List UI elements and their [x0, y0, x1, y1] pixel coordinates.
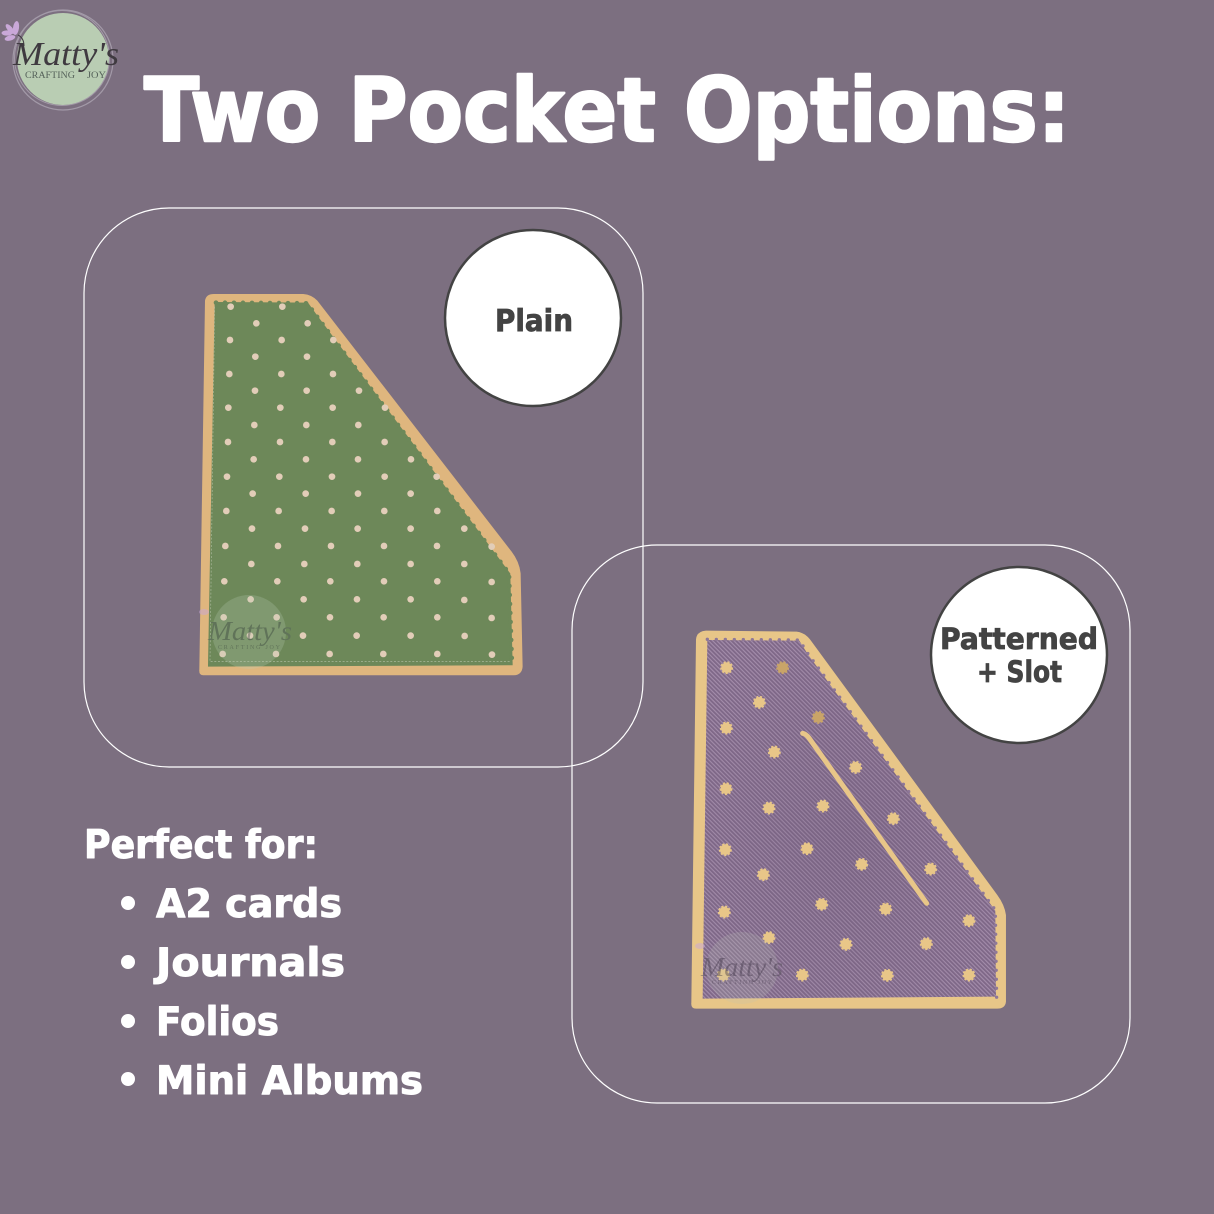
watermark logo: Matty's [700, 952, 783, 982]
text block: perfect for list [84, 823, 423, 1104]
logo: Matty's Crafting Joy: Matty's [12, 36, 119, 73]
list heading: Perfect for: [84, 823, 318, 868]
list item: Mini Albums: Mini Albums [156, 1059, 423, 1104]
slot [803, 733, 927, 903]
title: Two Pocket Options: [144, 59, 1070, 162]
badge: Patterned + Slot: Patterned [940, 622, 1098, 656]
watermark logo [199, 595, 292, 669]
watermark logo: CRAFTING JOY [218, 645, 281, 651]
badge: Plain: Plain [495, 304, 573, 339]
watermark logo: CRAFTING JOY [712, 980, 773, 986]
badge: Patterned + Slot: + Slot [977, 655, 1062, 689]
pocket: green polka dot [199, 294, 523, 675]
logo: Matty's Crafting Joy: CRAFTING [25, 70, 76, 80]
panel: plain pocket [84, 208, 643, 767]
pocket: purple patterned [691, 631, 1006, 1009]
logo: Matty's Crafting Joy [2, 10, 119, 110]
watermark logo [695, 932, 783, 1004]
list item: Folios: Folios [156, 1000, 279, 1045]
list item: A2 cards: A2 cards [156, 882, 342, 927]
badge: Plain [445, 230, 621, 406]
panel: patterned pocket with slot [572, 545, 1130, 1103]
polka dots [219, 303, 495, 658]
list item: Journals: Journals [153, 941, 345, 986]
logo: Matty's Crafting Joy: JOY [87, 70, 107, 80]
watermark logo: Matty's [207, 616, 292, 646]
badge: Patterned + Slot [931, 567, 1107, 743]
panel outline: patterned [572, 545, 1130, 1103]
star holes [718, 662, 974, 981]
panel outline: plain [84, 208, 643, 767]
